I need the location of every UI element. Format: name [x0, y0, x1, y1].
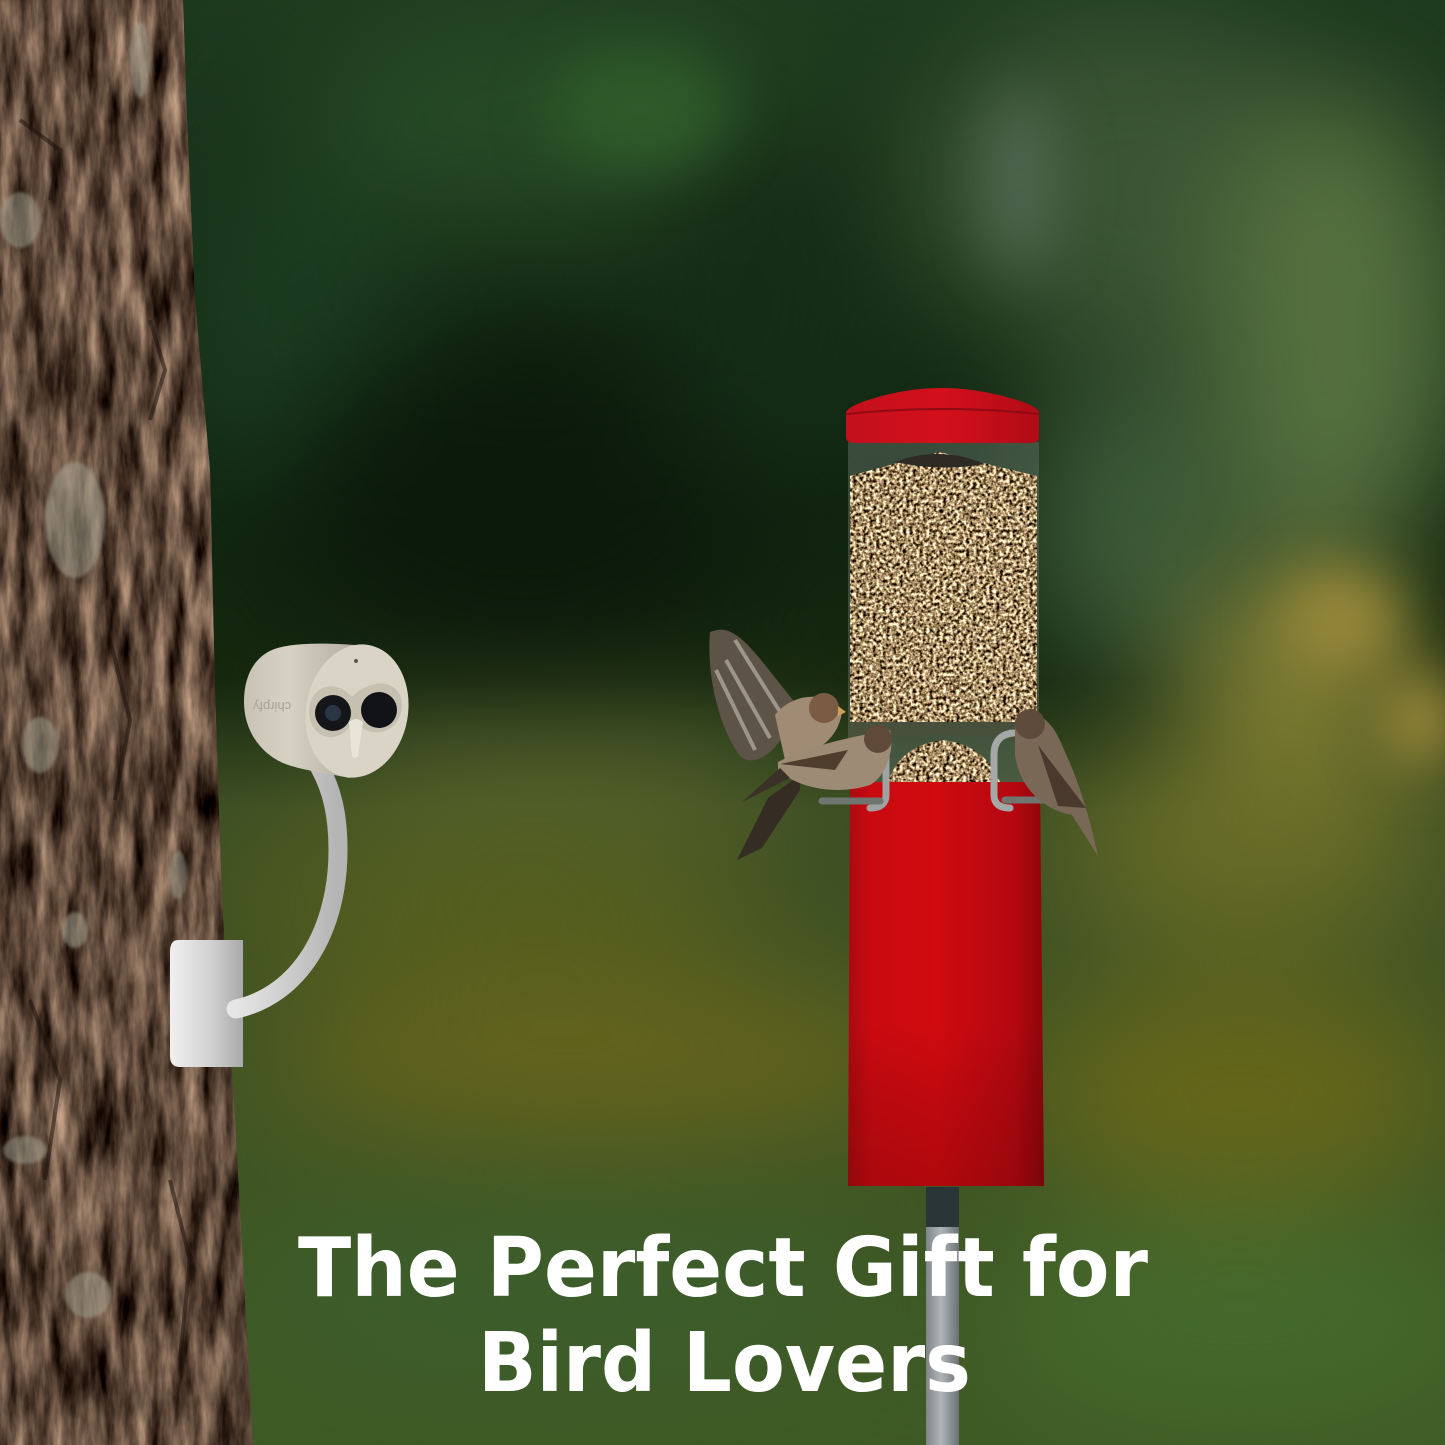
camera wall mount	[170, 940, 243, 1067]
bird: perched sparrow, right	[1015, 709, 1098, 856]
indicator dot	[354, 659, 358, 663]
bird feeder	[846, 388, 1044, 1186]
red baffle base	[848, 782, 1044, 1186]
title	[298, 1221, 1149, 1411]
pole	[926, 1187, 959, 1445]
left perch	[822, 740, 886, 808]
right lens	[361, 692, 397, 728]
right perch	[994, 733, 1060, 808]
seed fill	[850, 452, 1037, 782]
title line 2: Bird Lovers	[478, 1316, 971, 1411]
camera brand label: chirpfy	[252, 699, 291, 714]
title line 1: The Perfect Gift for	[298, 1221, 1149, 1316]
bird: flying sparrow	[709, 630, 846, 860]
seed tube glass	[848, 442, 1039, 784]
owl camera	[244, 636, 419, 786]
owl face	[295, 636, 419, 786]
bird: perched sparrow, left	[742, 725, 892, 802]
tree trunk	[0, 0, 253, 1445]
feeder cap	[846, 388, 1039, 443]
camera flexible arm	[236, 768, 338, 1009]
left lens	[315, 695, 351, 731]
beak	[349, 719, 363, 758]
camera body	[244, 644, 355, 778]
